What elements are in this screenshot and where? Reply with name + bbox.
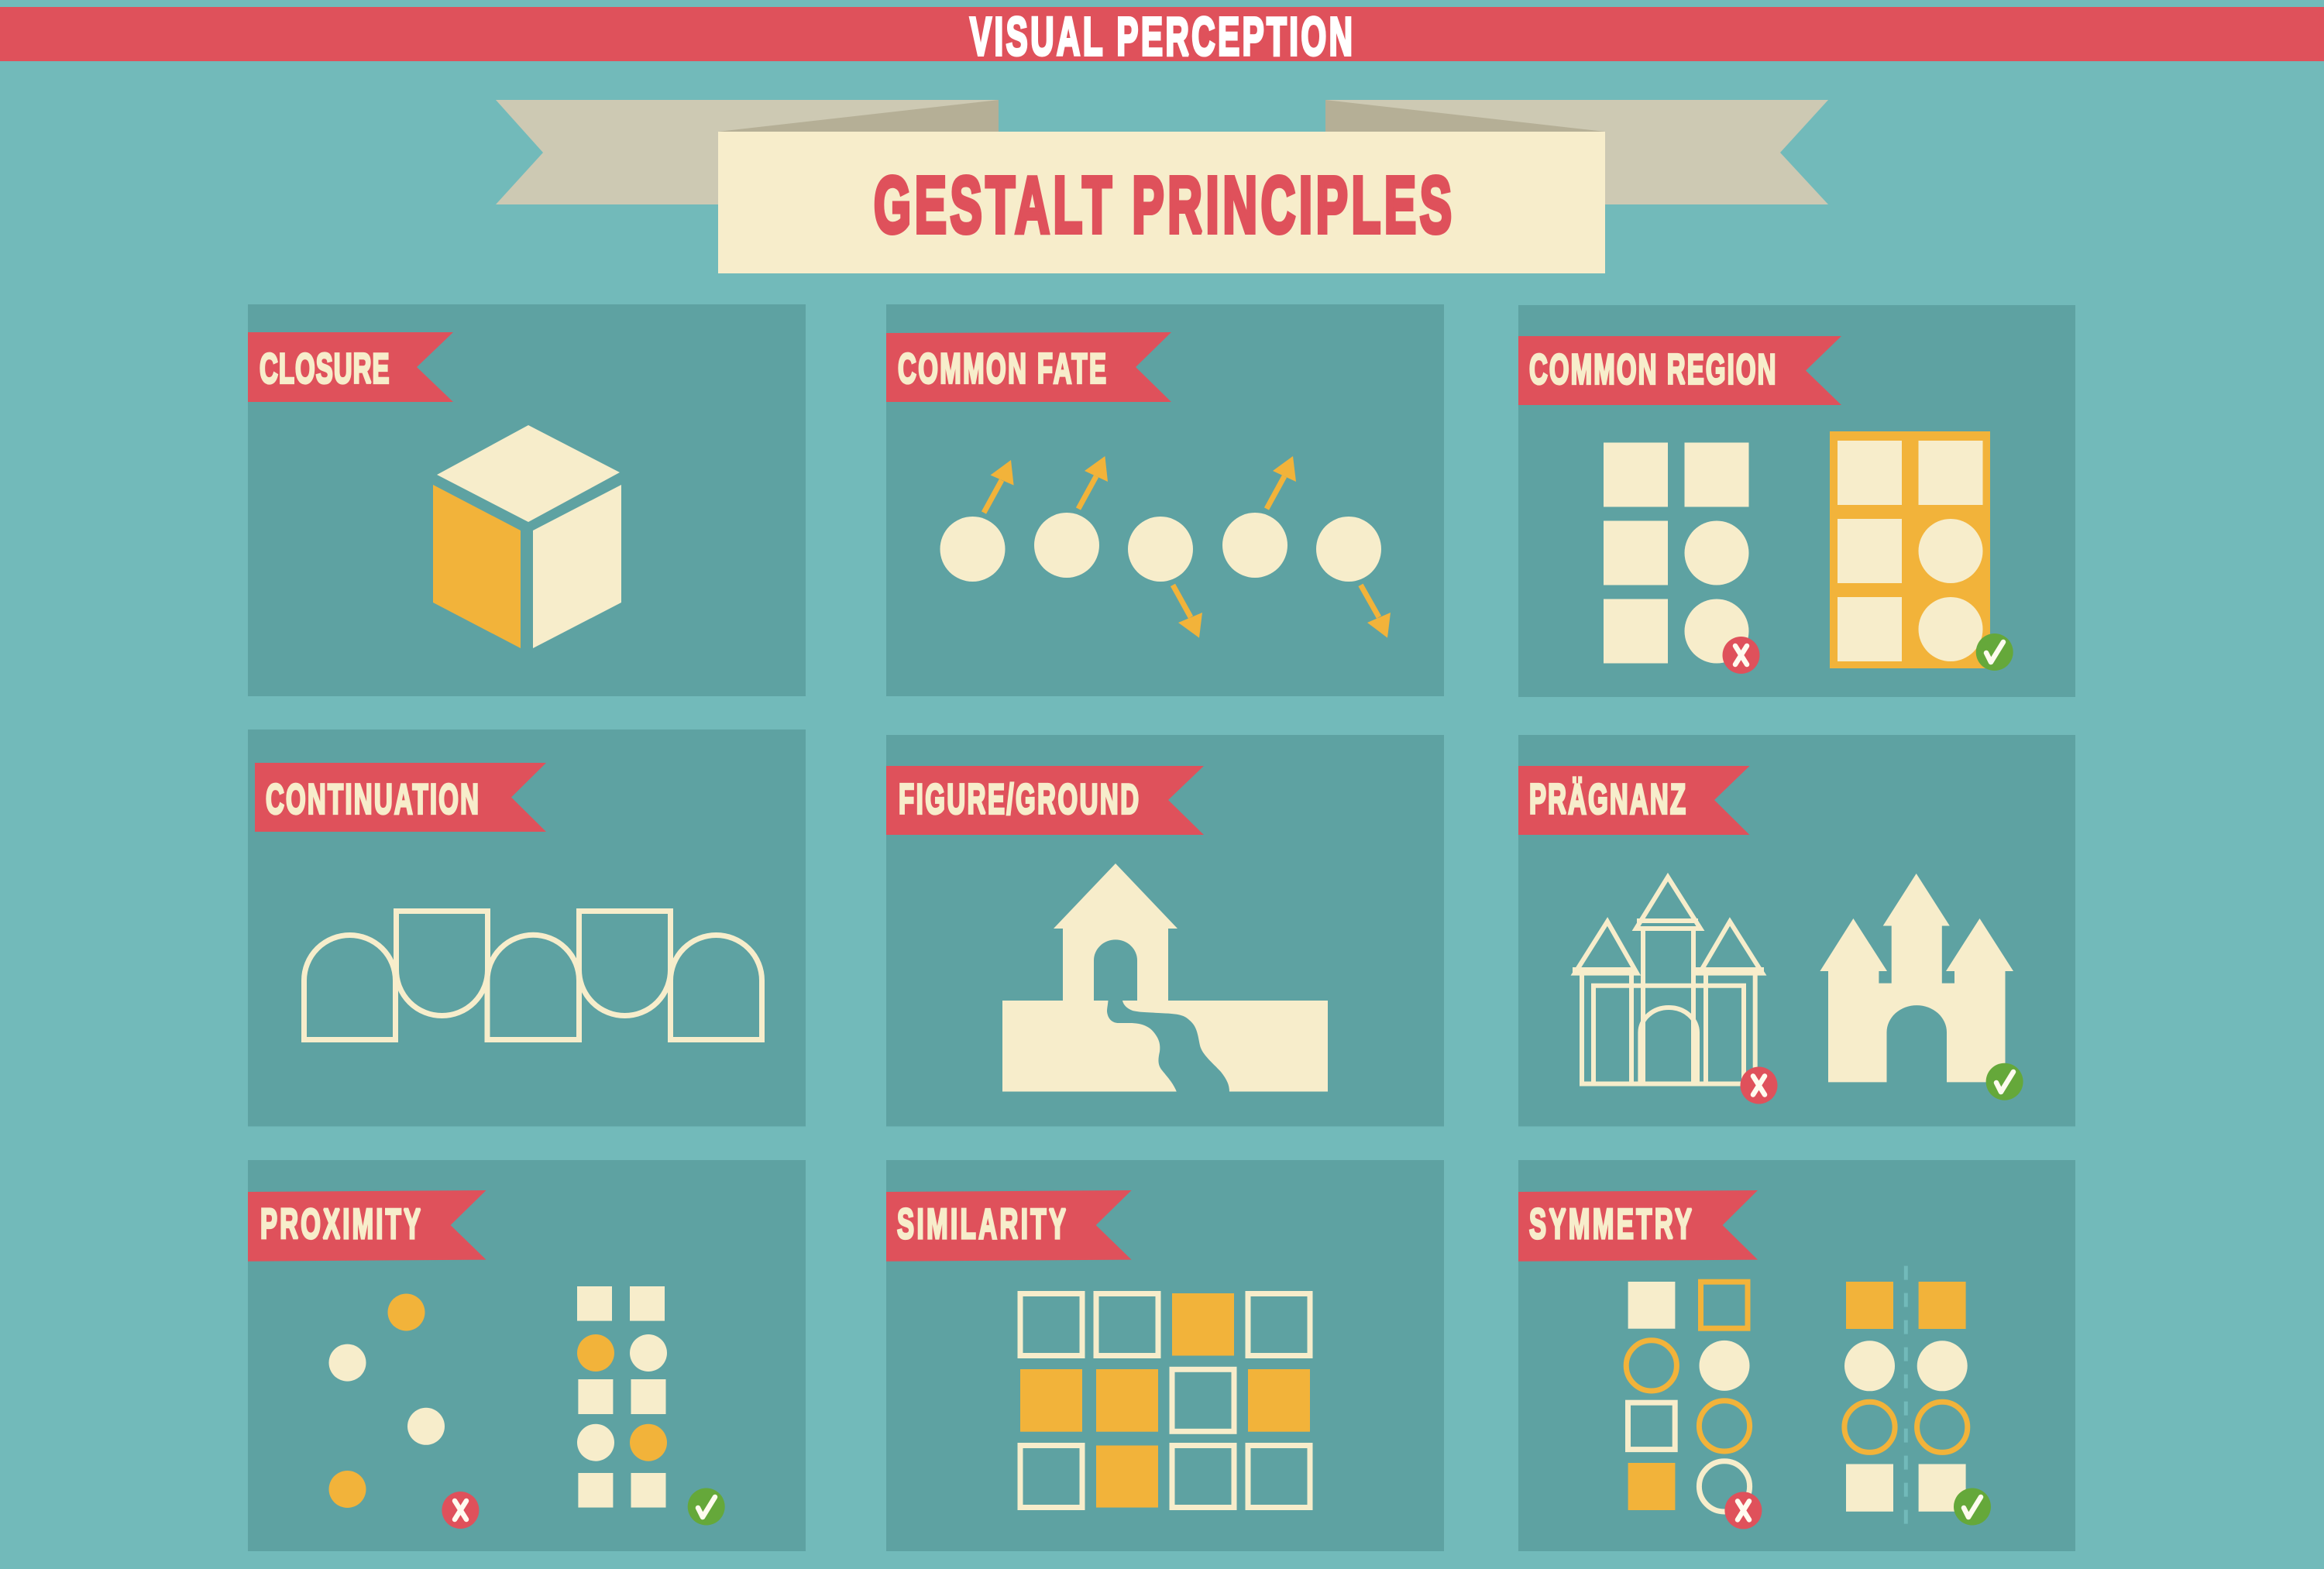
header bar [0, 7, 2324, 67]
icon: open cube [433, 425, 621, 648]
banner: figure ground: FIGURE/GROUND [899, 775, 1139, 823]
banner: proximity: PROXIMITY [260, 1200, 421, 1248]
banner: figure ground [886, 766, 1204, 835]
panel: closure [248, 304, 806, 696]
banner: proximity [248, 1190, 486, 1262]
badge: correct [1986, 1063, 2023, 1100]
badge: correct [688, 1488, 725, 1526]
banner: symmetry [1518, 1190, 1758, 1262]
icon: interlocking arches [304, 911, 762, 1039]
badge: correct [1976, 633, 2013, 671]
scattered dots [328, 1293, 445, 1508]
shapes without region [1604, 443, 1749, 663]
panel: symmetry [1518, 1160, 2075, 1551]
panel: continuation [248, 730, 806, 1126]
banner: common region [1518, 336, 1841, 405]
header bar: VISUAL PERCEPTION [970, 7, 1353, 67]
banner: pragnanz [1518, 766, 1749, 835]
banner: closure [248, 332, 453, 402]
badge: wrong [1740, 1067, 1777, 1104]
badge: wrong [442, 1492, 479, 1529]
title ribbon [496, 100, 1828, 273]
icon: outlined castle [1573, 877, 1764, 1086]
banner: pragnanz: PRÄGNANZ [1529, 775, 1686, 823]
panel: common fate [886, 304, 1444, 696]
banner: common fate: COMMON FATE [898, 345, 1106, 393]
badge: correct [1954, 1488, 1991, 1526]
banner: common fate [886, 332, 1171, 402]
banner: continuation [255, 763, 546, 832]
banner: symmetry: SYMMETRY [1529, 1200, 1692, 1248]
grouped shapes [577, 1286, 667, 1508]
shapes within orange region [1830, 431, 1990, 668]
banner: closure: CLOSURE [260, 345, 390, 393]
panel: pragnanz [1518, 735, 2075, 1126]
icon: solid castle [1820, 874, 2013, 1082]
panel: common region [1518, 305, 2075, 697]
banner: common region: COMMON REGION [1529, 345, 1776, 393]
title ribbon: GESTALT PRINCIPLES [874, 160, 1452, 249]
dots row [940, 513, 1381, 582]
grid: similar squares [1020, 1293, 1310, 1508]
icon: tower and river [1002, 863, 1328, 1092]
banner: continuation: CONTINUATION [266, 775, 479, 823]
panel: figure ground [886, 735, 1444, 1126]
symmetric shapes [1844, 1266, 1968, 1524]
asymmetric shapes [1626, 1282, 1750, 1512]
banner: similarity: SIMILARITY [897, 1200, 1066, 1248]
badge: wrong [1723, 637, 1760, 674]
banner: similarity [886, 1190, 1132, 1262]
panel: similarity [886, 1160, 1444, 1551]
arrows: up and down [984, 456, 1391, 638]
panel: proximity [248, 1160, 806, 1551]
badge: wrong [1724, 1492, 1762, 1529]
